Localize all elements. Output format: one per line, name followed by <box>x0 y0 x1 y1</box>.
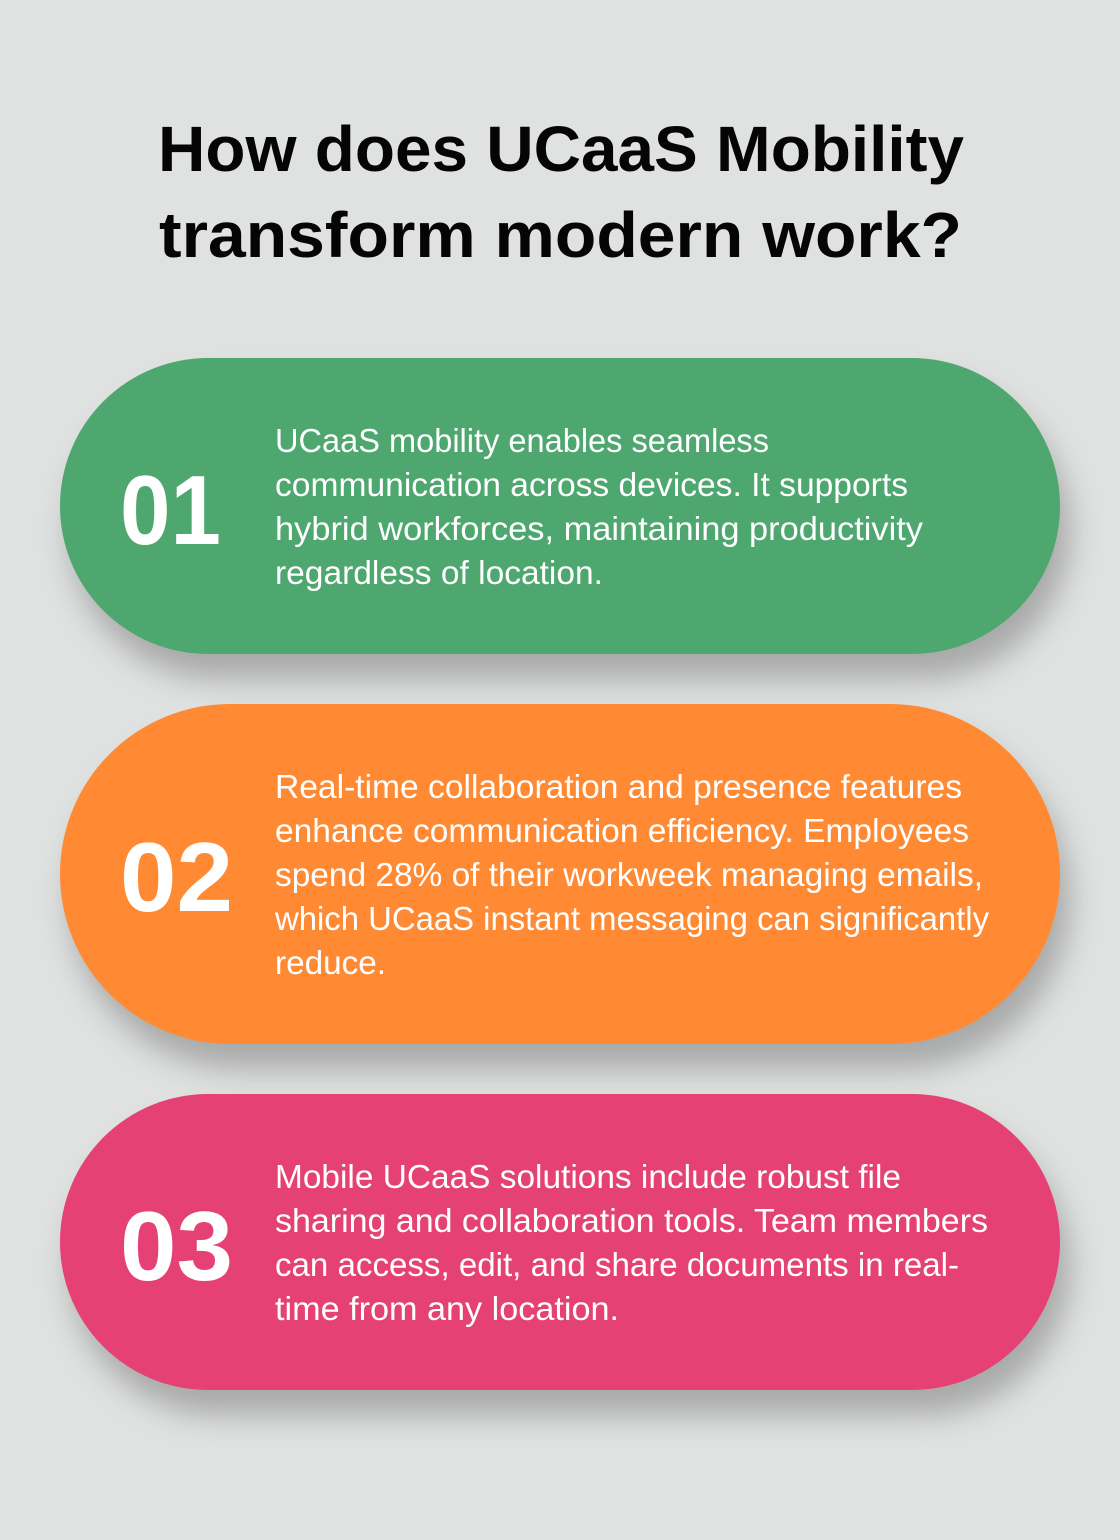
text block 01: UCaaS mobility enables seamless <box>275 422 769 459</box>
text block 01: regardless of location. <box>275 554 603 591</box>
number 01: 01 <box>120 455 221 565</box>
text block 03 <box>275 1158 988 1327</box>
orange pill <box>60 704 1060 1044</box>
text block 01: hybrid workforces, maintaining productivity <box>275 510 924 547</box>
text block 01 <box>275 422 924 591</box>
panel: step 02 <box>60 704 1060 1044</box>
text block 02: which UCaaS instant messaging can significantly <box>274 900 989 937</box>
panel: step 03 <box>60 1094 1060 1390</box>
text block 02: reduce. <box>275 944 386 981</box>
text block 03: time from any location. <box>275 1290 619 1327</box>
number 02: 02 <box>120 822 233 932</box>
title: transform modern work? <box>159 199 962 271</box>
green pill <box>60 358 1060 654</box>
text block 03: sharing and collaboration tools. Team members <box>275 1202 988 1239</box>
pink pill <box>60 1094 1060 1390</box>
number 03: 03 <box>120 1191 233 1301</box>
text block 03: Mobile UCaaS solutions include robust file <box>275 1158 901 1195</box>
text block 01: communication across devices. It supports <box>275 466 908 503</box>
text block 02 <box>274 768 989 981</box>
text block 02: spend 28% of their workweek managing emails, <box>275 856 983 893</box>
text block 02: enhance communication efficiency. Employees <box>275 812 969 849</box>
title: How does UCaaS Mobility <box>158 113 964 185</box>
panel: step 01 <box>60 358 1060 654</box>
title <box>158 113 964 271</box>
text block 03: can access, edit, and share documents in real- <box>275 1246 959 1283</box>
text block 02: Real-time collaboration and presence features <box>275 768 962 805</box>
